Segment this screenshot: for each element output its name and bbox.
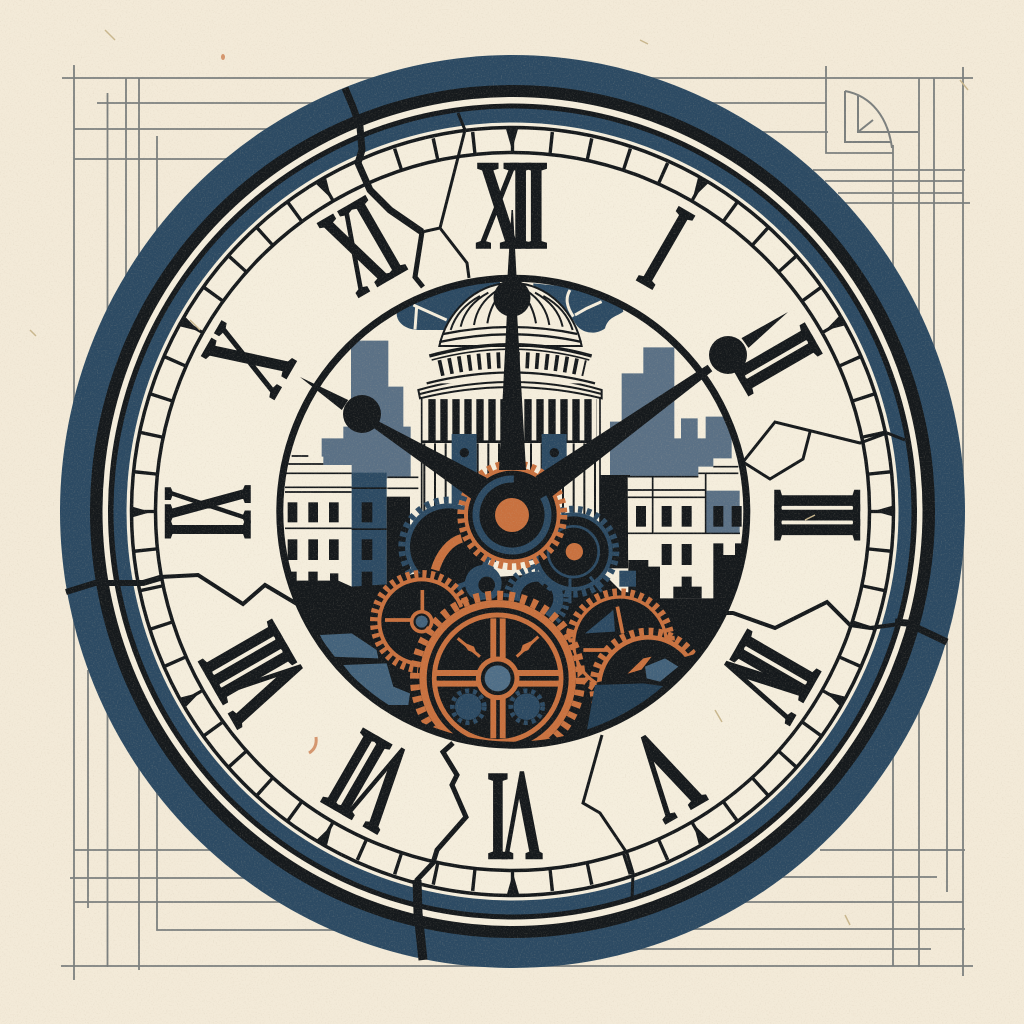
left buildings (285, 455, 418, 587)
left orange gear (373, 573, 470, 670)
roman numerals (137, 134, 889, 889)
roman numerals: VIII (173, 604, 336, 745)
cracks in the dial (66, 88, 947, 960)
right hand (536, 312, 788, 498)
minute track (132, 128, 894, 896)
roman numerals: VI (488, 746, 543, 889)
colonnade (422, 393, 600, 527)
window bezel (280, 278, 747, 745)
roman numerals: VII (305, 704, 434, 861)
dome ribs (451, 290, 573, 330)
roman numerals: X (175, 303, 322, 415)
dark blue gears behind (402, 500, 616, 628)
drum (437, 350, 587, 382)
blue rocks (320, 633, 410, 705)
dome (439, 283, 582, 346)
roman numerals: III (746, 488, 889, 541)
large orange gear (415, 595, 581, 761)
centre window scene (280, 278, 753, 761)
distant skyscrapers (322, 341, 732, 478)
storm clouds (396, 282, 624, 333)
right buildings (600, 458, 742, 598)
right orange gears (566, 588, 696, 730)
roman numerals: XII (475, 134, 547, 277)
roman numerals: II (705, 306, 848, 411)
blueprint grid lines (61, 65, 973, 980)
clock case rings (60, 55, 965, 968)
roman numerals: V (608, 701, 724, 851)
central gear (461, 464, 564, 566)
roman numerals: IX (137, 485, 279, 540)
icon: drafting quarter-circle mark (845, 91, 918, 148)
hour triangle markers (130, 129, 895, 894)
roman numerals: IIV (691, 613, 847, 741)
cornice (417, 383, 603, 400)
roman numerals: XI (300, 169, 422, 322)
hand hub overlay (463, 466, 561, 564)
dark ground (291, 572, 723, 739)
roman numerals: I (620, 180, 712, 315)
vertical hand (494, 210, 530, 470)
clock hands (300, 210, 788, 500)
left hand (300, 377, 487, 500)
capitol building (418, 283, 602, 527)
